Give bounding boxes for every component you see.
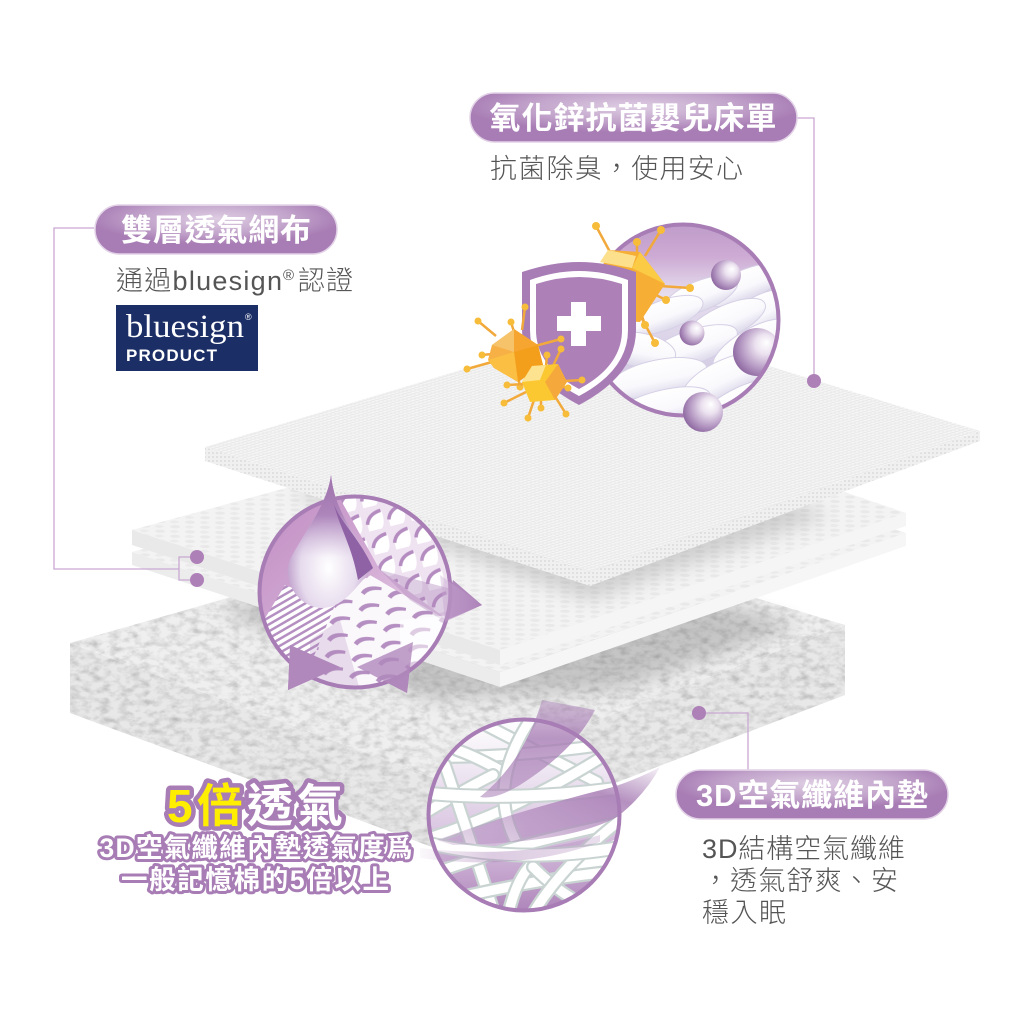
arrows (288, 580, 482, 693)
lower mesh sheet (132, 425, 906, 687)
airflow swooshes (420, 700, 660, 862)
heading pill: zinc oxide antibacterial sheet (470, 93, 797, 142)
description: 3D air fibre (702, 834, 905, 928)
callout: five times breathability (100, 780, 412, 895)
description: 3D air fibre: 穩入眠 (702, 898, 786, 928)
logo: bluesign product: bluesign (126, 309, 244, 345)
heading pill: double layer mesh (95, 205, 337, 254)
arrow overlays (288, 575, 482, 693)
upper mesh sheet (132, 405, 906, 665)
description: bluesign certification: 通過bluesign (116, 266, 282, 296)
double mesh layers (132, 405, 906, 687)
virus: lower left (464, 304, 564, 390)
description: 3D air fibre: 3D結構空氣纖維 (702, 834, 905, 864)
logo: bluesign product (116, 305, 258, 371)
heading pill: 3D air fibre pad: 3D空氣纖維內墊 (696, 778, 928, 813)
logo: bluesign product: PRODUCT (126, 346, 218, 365)
callout line: bed sheet (797, 118, 821, 388)
logo: bluesign product: ® (245, 312, 252, 322)
description: bluesign certification: 認證 (298, 266, 353, 296)
description: bluesign certification: ® (283, 267, 294, 284)
heading pill: double layer mesh: 雙層透氣網布 (121, 213, 311, 248)
bead circle: soft fibre close-up (603, 222, 780, 432)
shield icon with cross (522, 262, 636, 405)
description: 3D air fibre: ，透氣舒爽、安 (702, 866, 898, 896)
callout line: air fibre pad (692, 706, 748, 770)
foam layer: 3D air fibre pad (70, 520, 845, 850)
callout line: double mesh (54, 228, 204, 587)
heading pill: zinc oxide antibacterial sheet: 氧化鋅抗菌嬰兒床單 (490, 101, 776, 136)
icon: water drop (288, 475, 373, 608)
callout: five times breathability: 5倍透氣 (167, 780, 343, 832)
description: antibacterial: 抗菌除臭，使用安心 (490, 154, 743, 184)
heading pill: 3D air fibre pad (676, 770, 948, 819)
fibre circle with airflow (420, 700, 660, 915)
pearl beads (680, 260, 741, 432)
top sheet: zinc oxide antibacterial (205, 321, 980, 586)
clipped pearl (733, 328, 775, 376)
callout: five times breathability: 一般記憶棉的5倍以上 (121, 865, 389, 895)
callout: five times breathability: 3D空氣纖維內墊透氣度爲 (100, 833, 412, 863)
virus: lower centre (500, 346, 586, 422)
virus: large behind shield (592, 222, 694, 347)
mesh circle with water drop (258, 475, 482, 700)
